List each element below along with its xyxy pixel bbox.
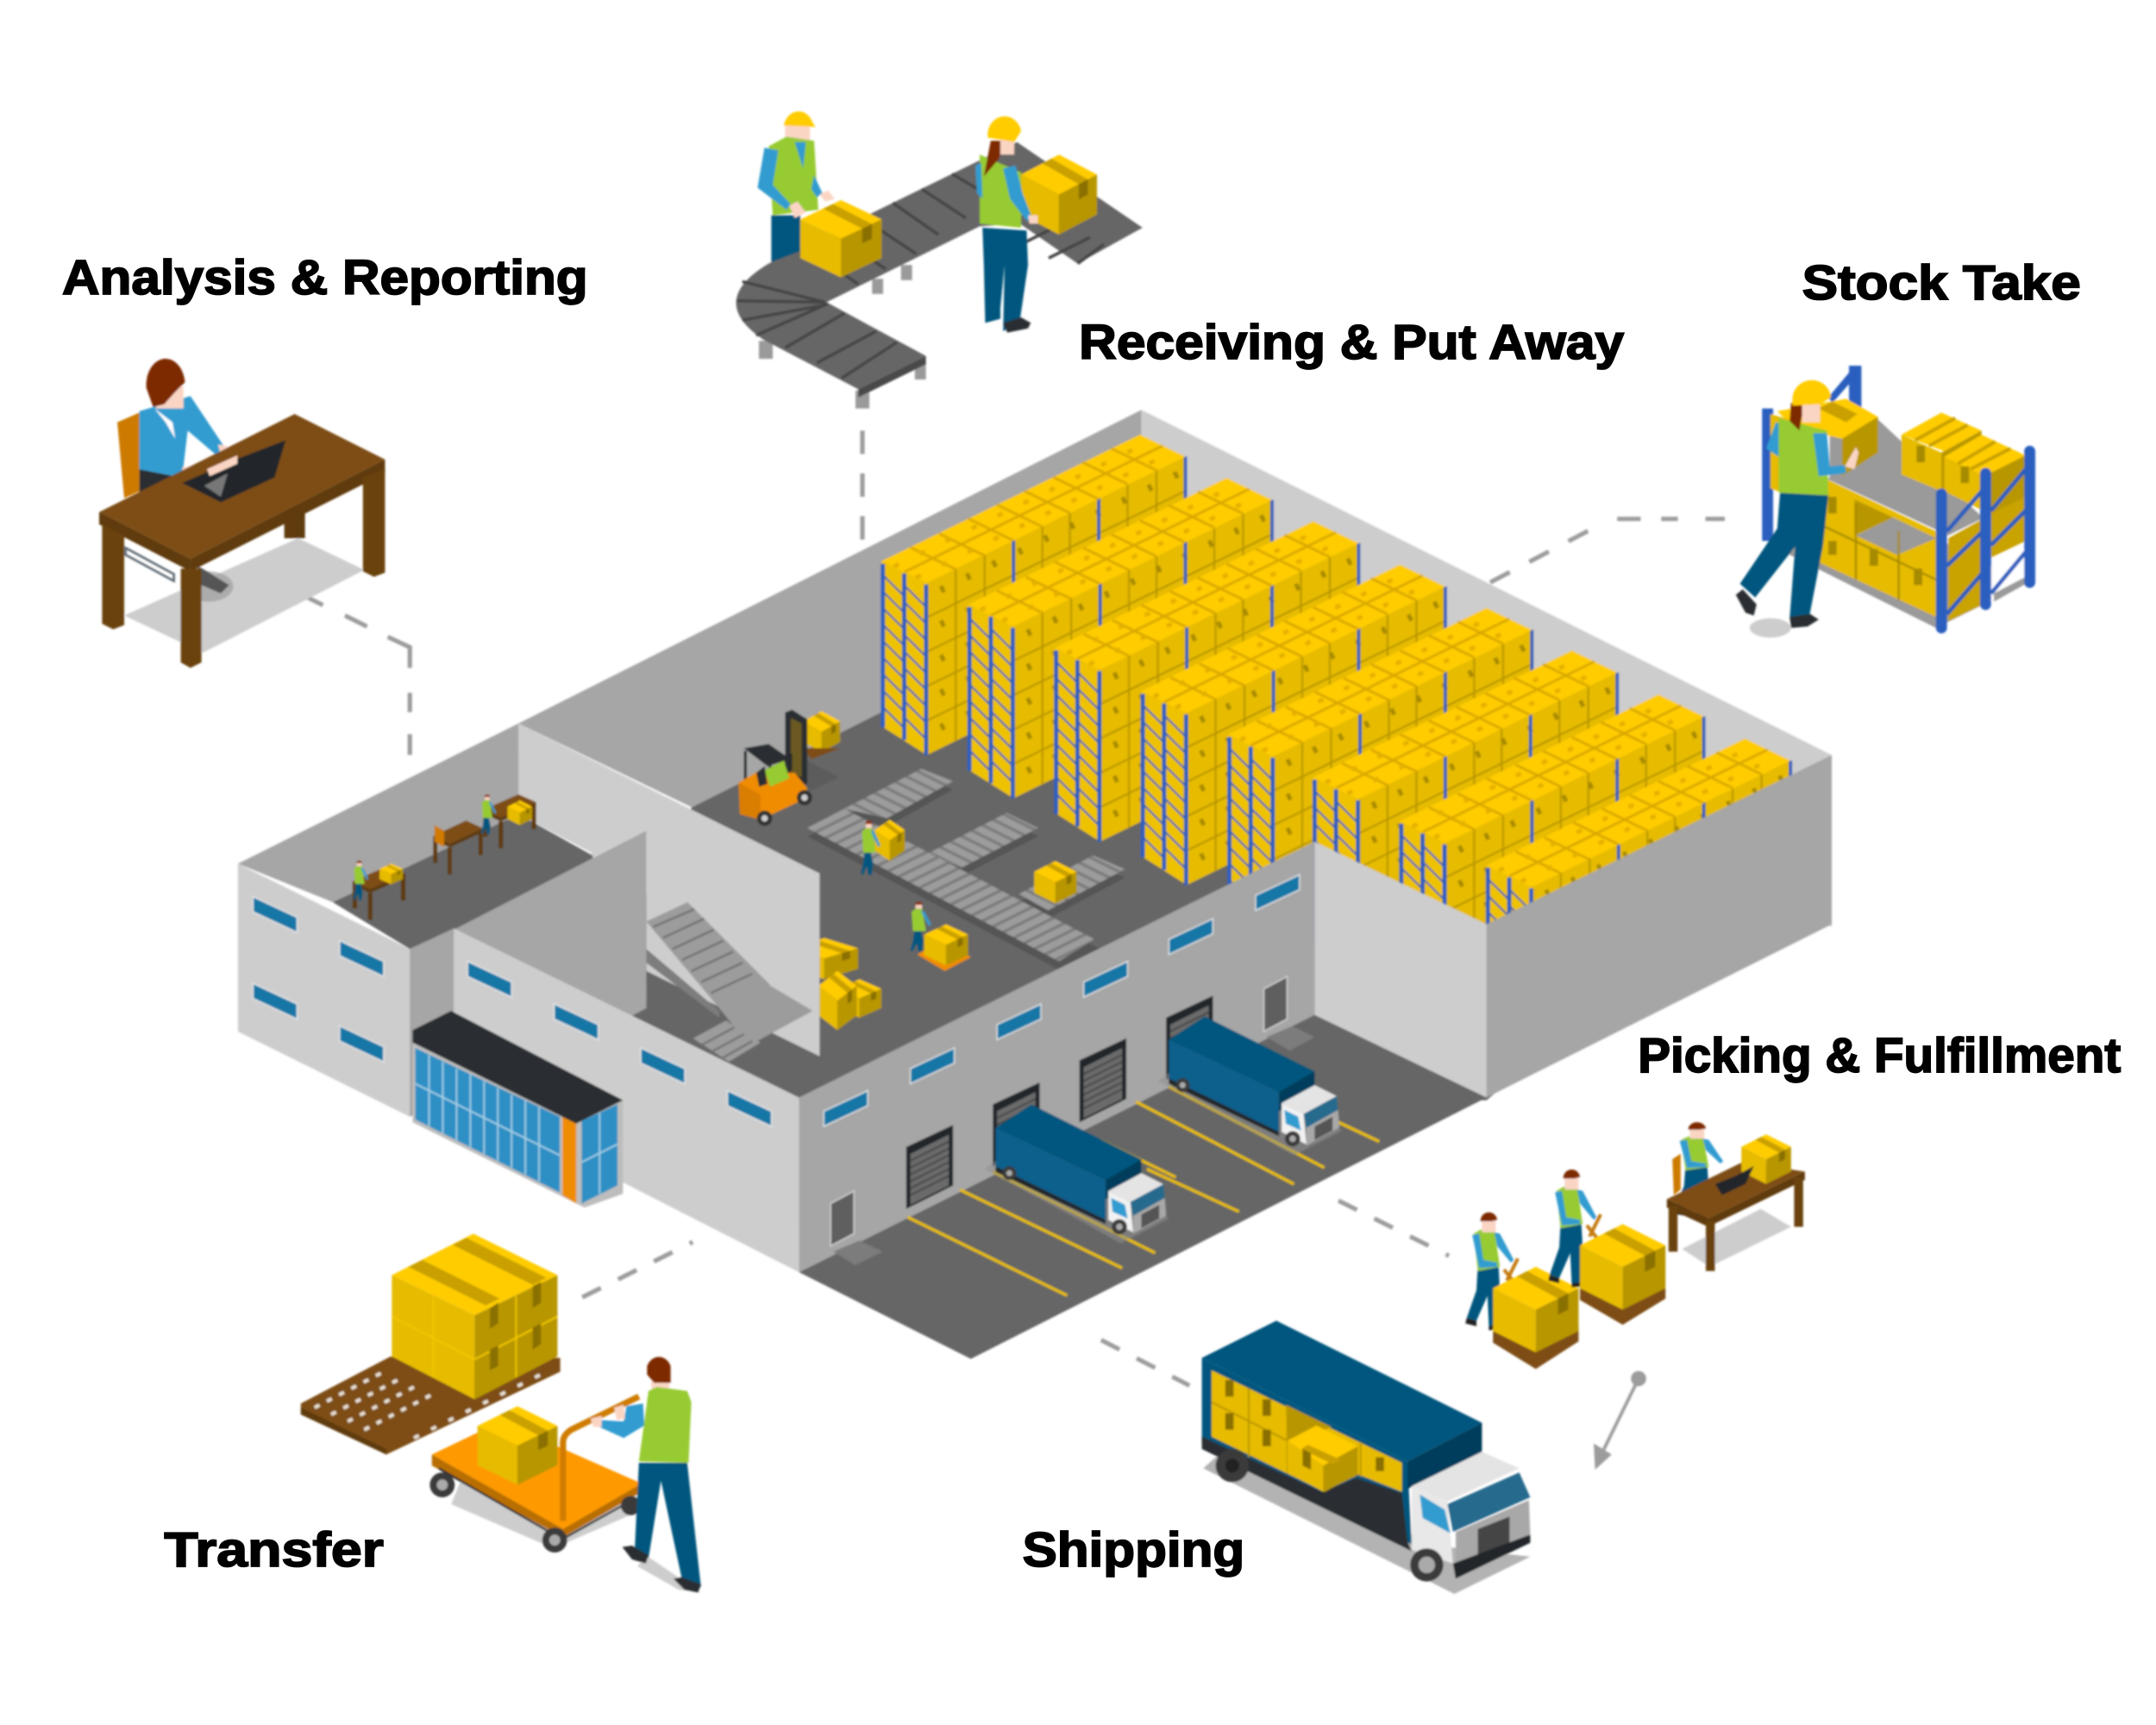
heading: Transfer: Transfer — [164, 1523, 384, 1578]
scene: stock take rack — [1736, 366, 2030, 637]
back left interior wall — [518, 410, 1141, 807]
scene: picking and fulfillment — [1465, 1122, 1805, 1369]
stacked boxes at partition — [818, 937, 883, 1032]
truck wheels — [1216, 1449, 1444, 1582]
forklift — [738, 710, 840, 826]
right block end wall — [1314, 842, 1487, 1097]
exterior wall with loading docks — [799, 842, 1314, 1272]
heading: Picking & Fulfillment: Picking & Fulfillment — [1638, 1029, 2121, 1083]
held box — [1771, 398, 1878, 497]
right block outer wall — [1487, 755, 1832, 1097]
truck cargo body side — [1202, 1358, 1412, 1544]
conveyors — [807, 768, 1125, 969]
worker with pallet two — [1548, 1170, 1665, 1325]
truck cab — [1412, 1452, 1530, 1578]
office worker — [140, 359, 237, 494]
rack end panels — [1948, 497, 2028, 621]
warehouse building — [238, 410, 1832, 1358]
rack front posts and braces — [1941, 451, 2030, 628]
exterior wall left wing — [238, 863, 410, 1117]
stairs — [646, 902, 812, 1062]
truck cargo top — [1202, 1320, 1482, 1461]
scene: receiving conveyor — [736, 111, 1143, 409]
dock truck front — [985, 1104, 1169, 1243]
office desks and workers — [353, 794, 536, 919]
illustration group — [99, 111, 2030, 1594]
conveyor box near woman — [1021, 154, 1097, 235]
boxes on rack lower — [1820, 476, 1936, 617]
scene: analysis and reporting desk — [99, 359, 385, 668]
desk top — [99, 414, 385, 559]
boxes on rack upper — [1902, 412, 2026, 527]
back right interior wall — [1141, 410, 1832, 927]
stock take worker — [1736, 380, 1858, 637]
truck boxes — [1212, 1371, 1402, 1492]
dashed connectors — [302, 430, 1725, 1385]
desk legs — [102, 469, 385, 668]
conveyor box near man — [800, 200, 881, 278]
box on cart — [478, 1406, 557, 1485]
service doors — [830, 976, 1314, 1265]
conveyor legs — [759, 265, 926, 409]
rack back posts — [1762, 366, 1861, 541]
truck cargo front — [1407, 1423, 1482, 1489]
worker with pallet one — [1465, 1213, 1578, 1369]
main entrance — [412, 1011, 623, 1208]
dock truck rear — [1158, 1016, 1342, 1155]
truck box sticking out — [1288, 1426, 1357, 1492]
windows — [253, 875, 1300, 1126]
scene: shipping truck — [1202, 1320, 1530, 1594]
truck floor — [1202, 1437, 1412, 1551]
rack shadow and shelves — [1771, 414, 2028, 628]
office worker lower body — [126, 548, 233, 602]
dock doors — [906, 995, 1213, 1209]
left office back wall — [238, 724, 518, 902]
scene: transfer pallet and cart — [301, 1233, 701, 1592]
cart — [429, 1396, 642, 1552]
pallet — [301, 1357, 561, 1454]
boxes on conveyors — [874, 819, 1077, 904]
middle shelf — [1827, 460, 1984, 536]
desk shadow — [124, 538, 364, 653]
storage racks — [881, 435, 1790, 1059]
left office floor — [333, 814, 592, 949]
heading: Stock Take: Stock Take — [1802, 256, 2081, 310]
box stack on pallet — [392, 1233, 557, 1399]
cart shadow — [451, 1477, 636, 1548]
desk back leg — [285, 513, 305, 538]
heading: Analysis & Reporting: Analysis & Reporting — [62, 251, 588, 305]
receiving worker woman — [975, 116, 1037, 333]
heading: Receiving & Put Away: Receiving & Put Away — [1079, 316, 1625, 370]
exterior wall center wing — [454, 928, 799, 1272]
exterior recess wall — [410, 928, 454, 1117]
picking desk — [1667, 1122, 1805, 1271]
receiving worker man — [757, 111, 835, 262]
worker at conveyor — [861, 820, 881, 875]
staircase well partition — [518, 724, 819, 1057]
laptop — [182, 440, 285, 502]
chair — [117, 412, 140, 499]
truck shadow — [1203, 1446, 1530, 1594]
main floor — [629, 581, 1746, 1101]
worker pushing cart — [911, 901, 971, 971]
loading yard — [799, 1015, 1487, 1358]
yard parking lines — [907, 1087, 1379, 1295]
stair room wall — [454, 831, 646, 1018]
heading: Shipping: Shipping — [1023, 1523, 1244, 1578]
transfer worker — [591, 1357, 701, 1592]
desk edge — [99, 512, 191, 571]
conveyor belt — [736, 142, 1143, 398]
arrow — [1594, 1371, 1646, 1470]
